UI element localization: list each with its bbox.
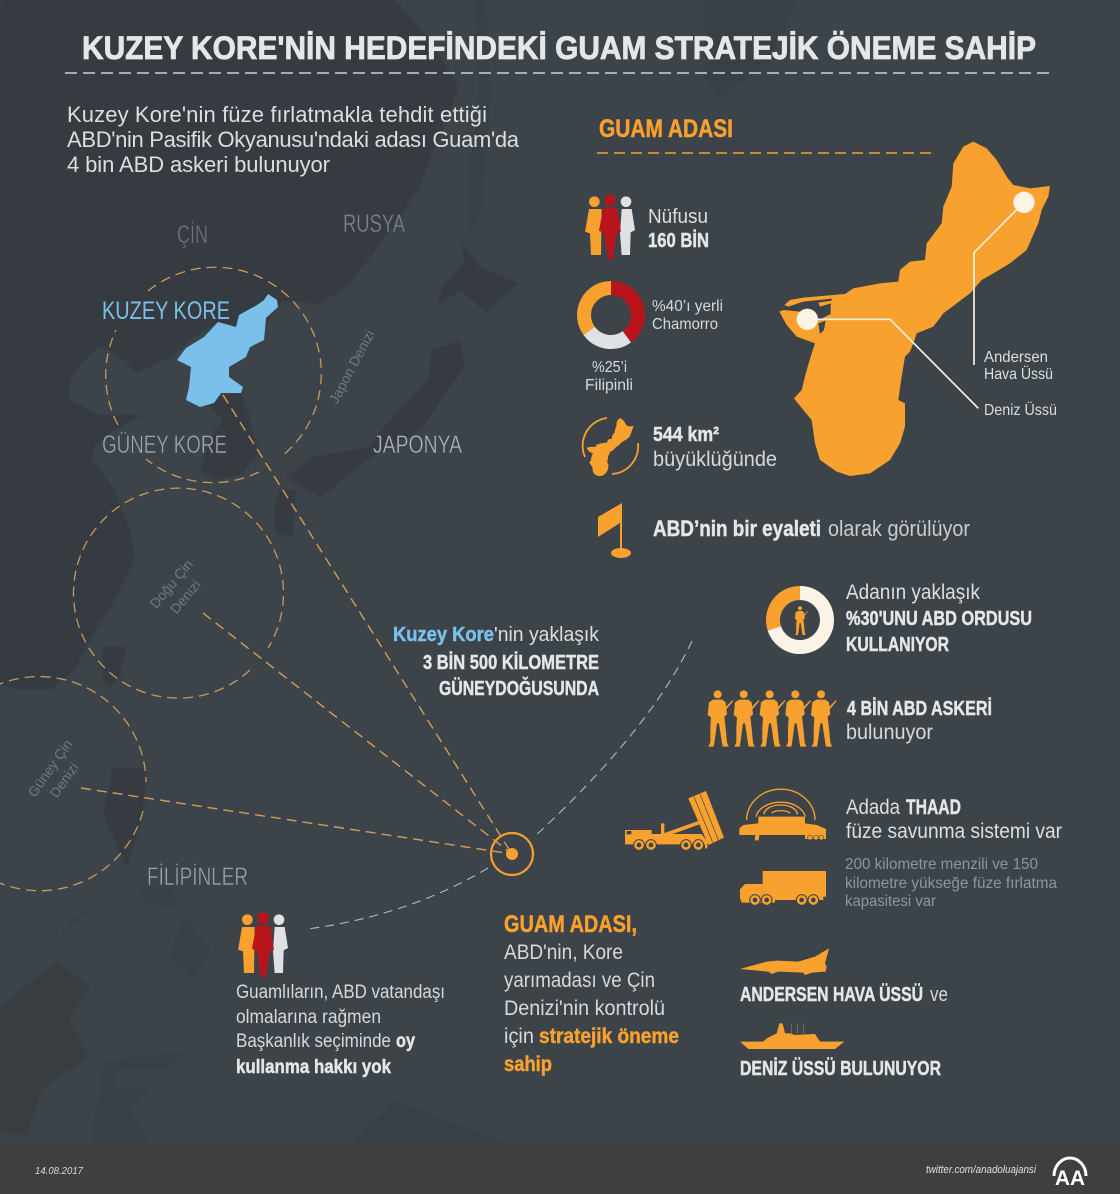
- Guam strategic importance text: sahip: [504, 1053, 552, 1076]
- sea labels: Japon Denizi: [326, 327, 378, 406]
- Guam strategic importance text: için: [504, 1025, 534, 1048]
- map labels: GÜNEY KORE: [102, 431, 227, 459]
- THAAD capacity note: kilometre yükseğe füze fırlatma: [845, 875, 1057, 892]
- area text: 544 km²: [653, 424, 719, 446]
- icon: box truck: [740, 871, 826, 905]
- intro text: [67, 102, 520, 177]
- Guam strategic importance text: Denizi'nin kontrolü: [504, 997, 665, 1020]
- background map: [0, 0, 796, 1146]
- icon: Anadolu Agency logo: [1054, 1158, 1086, 1190]
- THAAD capacity note: kapasitesi var: [845, 893, 937, 910]
- Guam strategic importance text: [504, 911, 679, 1076]
- icon: flag: [598, 503, 631, 558]
- curved connector lines: [308, 641, 692, 929]
- base labels: Andersen: [984, 349, 1048, 366]
- voting rights text: oy: [396, 1031, 415, 1052]
- distance text: 'nin yaklaşık: [494, 624, 600, 646]
- base labels: [984, 349, 1057, 419]
- distance text: [393, 624, 600, 700]
- dashed circles on map: [0, 267, 321, 891]
- demographics labels: %25’i: [592, 359, 627, 376]
- footer date: 14.08.2017: [35, 1166, 83, 1177]
- map labels: KUZEY KORE: [102, 297, 230, 325]
- air base text: ANDERSEN HAVA ÜSSÜ: [740, 983, 923, 1006]
- population text: [648, 206, 709, 252]
- icon: Anadolu Agency logo: AA: [1055, 1167, 1085, 1190]
- icon: THAAD launcher truck: [625, 791, 724, 850]
- distance lines to Guam: [81, 395, 512, 854]
- icon: fighter jet: [740, 948, 829, 975]
- map: North Korea: [177, 294, 278, 407]
- status text: [653, 516, 970, 541]
- soldiers text: [846, 697, 992, 744]
- THAAD capacity note: 200 kilometre menzili ve 150: [845, 856, 1038, 873]
- army share text: Adanın yaklaşık: [846, 581, 980, 604]
- Guam location marker: [491, 833, 533, 875]
- voting rights text: Başkanlık seçiminde: [236, 1031, 391, 1052]
- sea labels: Doğu Çin: [146, 556, 196, 611]
- sea labels: Denizi: [46, 760, 82, 801]
- map labels: [102, 210, 462, 891]
- THAAD text: Adada: [846, 796, 900, 819]
- area text: büyüklüğünde: [653, 448, 777, 471]
- THAAD text: [846, 796, 1062, 843]
- army share text: KULLANIYOR: [846, 634, 949, 656]
- sea labels: Denizi: [167, 577, 204, 617]
- status text: olarak görülüyor: [828, 516, 970, 541]
- naval base text: DENİZ ÜSSÜ BULUNUYOR: [740, 1057, 941, 1080]
- donut chart: demographics: [584, 288, 638, 342]
- distance text: Kuzey Kore: [393, 624, 494, 646]
- icon: radar truck: [739, 789, 826, 840]
- area text: [653, 424, 777, 471]
- icon: small Guam: [583, 418, 638, 476]
- population text: 160 BİN: [648, 229, 709, 252]
- status text: ABD’nin bir eyaleti: [653, 516, 821, 541]
- map labels: ÇİN: [177, 220, 208, 249]
- voting rights text: Guamlıların, ABD vatandaşı: [236, 982, 445, 1003]
- soldiers text: 4 BİN ABD ASKERİ: [847, 697, 992, 720]
- map labels: JAPONYA: [373, 431, 462, 459]
- sea labels: Güney Çin: [24, 736, 75, 800]
- Guam strategic importance text: stratejik öneme: [539, 1025, 679, 1048]
- THAAD text: füze savunma sistemi var: [846, 820, 1062, 843]
- footer twitter: twitter.com/anadoluajansi: [926, 1164, 1036, 1176]
- sea labels: [24, 327, 378, 801]
- footer bar: [0, 1146, 1120, 1194]
- voting rights text: kullanma hakkı yok: [236, 1057, 391, 1078]
- THAAD text: THAAD: [906, 796, 961, 819]
- donut chart: army land share: [773, 593, 827, 647]
- intro text: 4 bin ABD askeri bulunuyor: [67, 152, 330, 177]
- Guam Adası heading: GUAM ADASI: [599, 115, 733, 143]
- demographics labels: [585, 298, 723, 394]
- icon: population people: [585, 194, 635, 259]
- demographics labels: %40’ı yerli: [652, 298, 723, 315]
- air base text: ve: [930, 984, 948, 1006]
- army share text: %30'UNU ABD ORDUSU: [846, 608, 1032, 630]
- demographics labels: Chamorro: [652, 316, 718, 333]
- distance text: 3 BİN 500 KİLOMETRE: [423, 651, 599, 674]
- voting rights text: [236, 982, 445, 1078]
- icon: warship: [740, 1023, 844, 1049]
- Guam strategic importance text: yarımadası ve Çin: [504, 969, 655, 992]
- Guam strategic importance text: ABD'nin, Kore: [504, 941, 623, 964]
- intro text: Kuzey Kore'nin füze fırlatmakla tehdit ettiği: [67, 102, 487, 127]
- voting rights text: olmalarına rağmen: [236, 1007, 381, 1028]
- map labels: RUSYA: [343, 210, 405, 238]
- icon: Guamanian people: [238, 912, 288, 977]
- intro text: ABD'nin Pasifik Okyanusu'ndaki adası Guam'da: [67, 127, 520, 152]
- map: Guam island: [779, 142, 1050, 476]
- THAAD capacity note: [845, 856, 1057, 910]
- distance text: GÜNEYDOĞUSUNDA: [439, 676, 599, 700]
- army share text: [846, 581, 1032, 656]
- base labels: Hava Üssü: [984, 365, 1053, 383]
- map labels: FİLİPİNLER: [147, 862, 248, 891]
- icon: five soldiers: [708, 690, 837, 747]
- population text: Nüfusu: [648, 206, 708, 228]
- soldiers text: bulunuyor: [846, 721, 933, 744]
- demographics labels: Filipinli: [585, 377, 633, 394]
- Guam strategic importance text: GUAM ADASI,: [504, 911, 637, 938]
- base labels: Deniz Üssü: [984, 401, 1057, 419]
- title: KUZEY KORE'NİN HEDEFİNDEKİ GUAM STRATEJİK ÖNEME SAHİP: [82, 30, 1036, 66]
